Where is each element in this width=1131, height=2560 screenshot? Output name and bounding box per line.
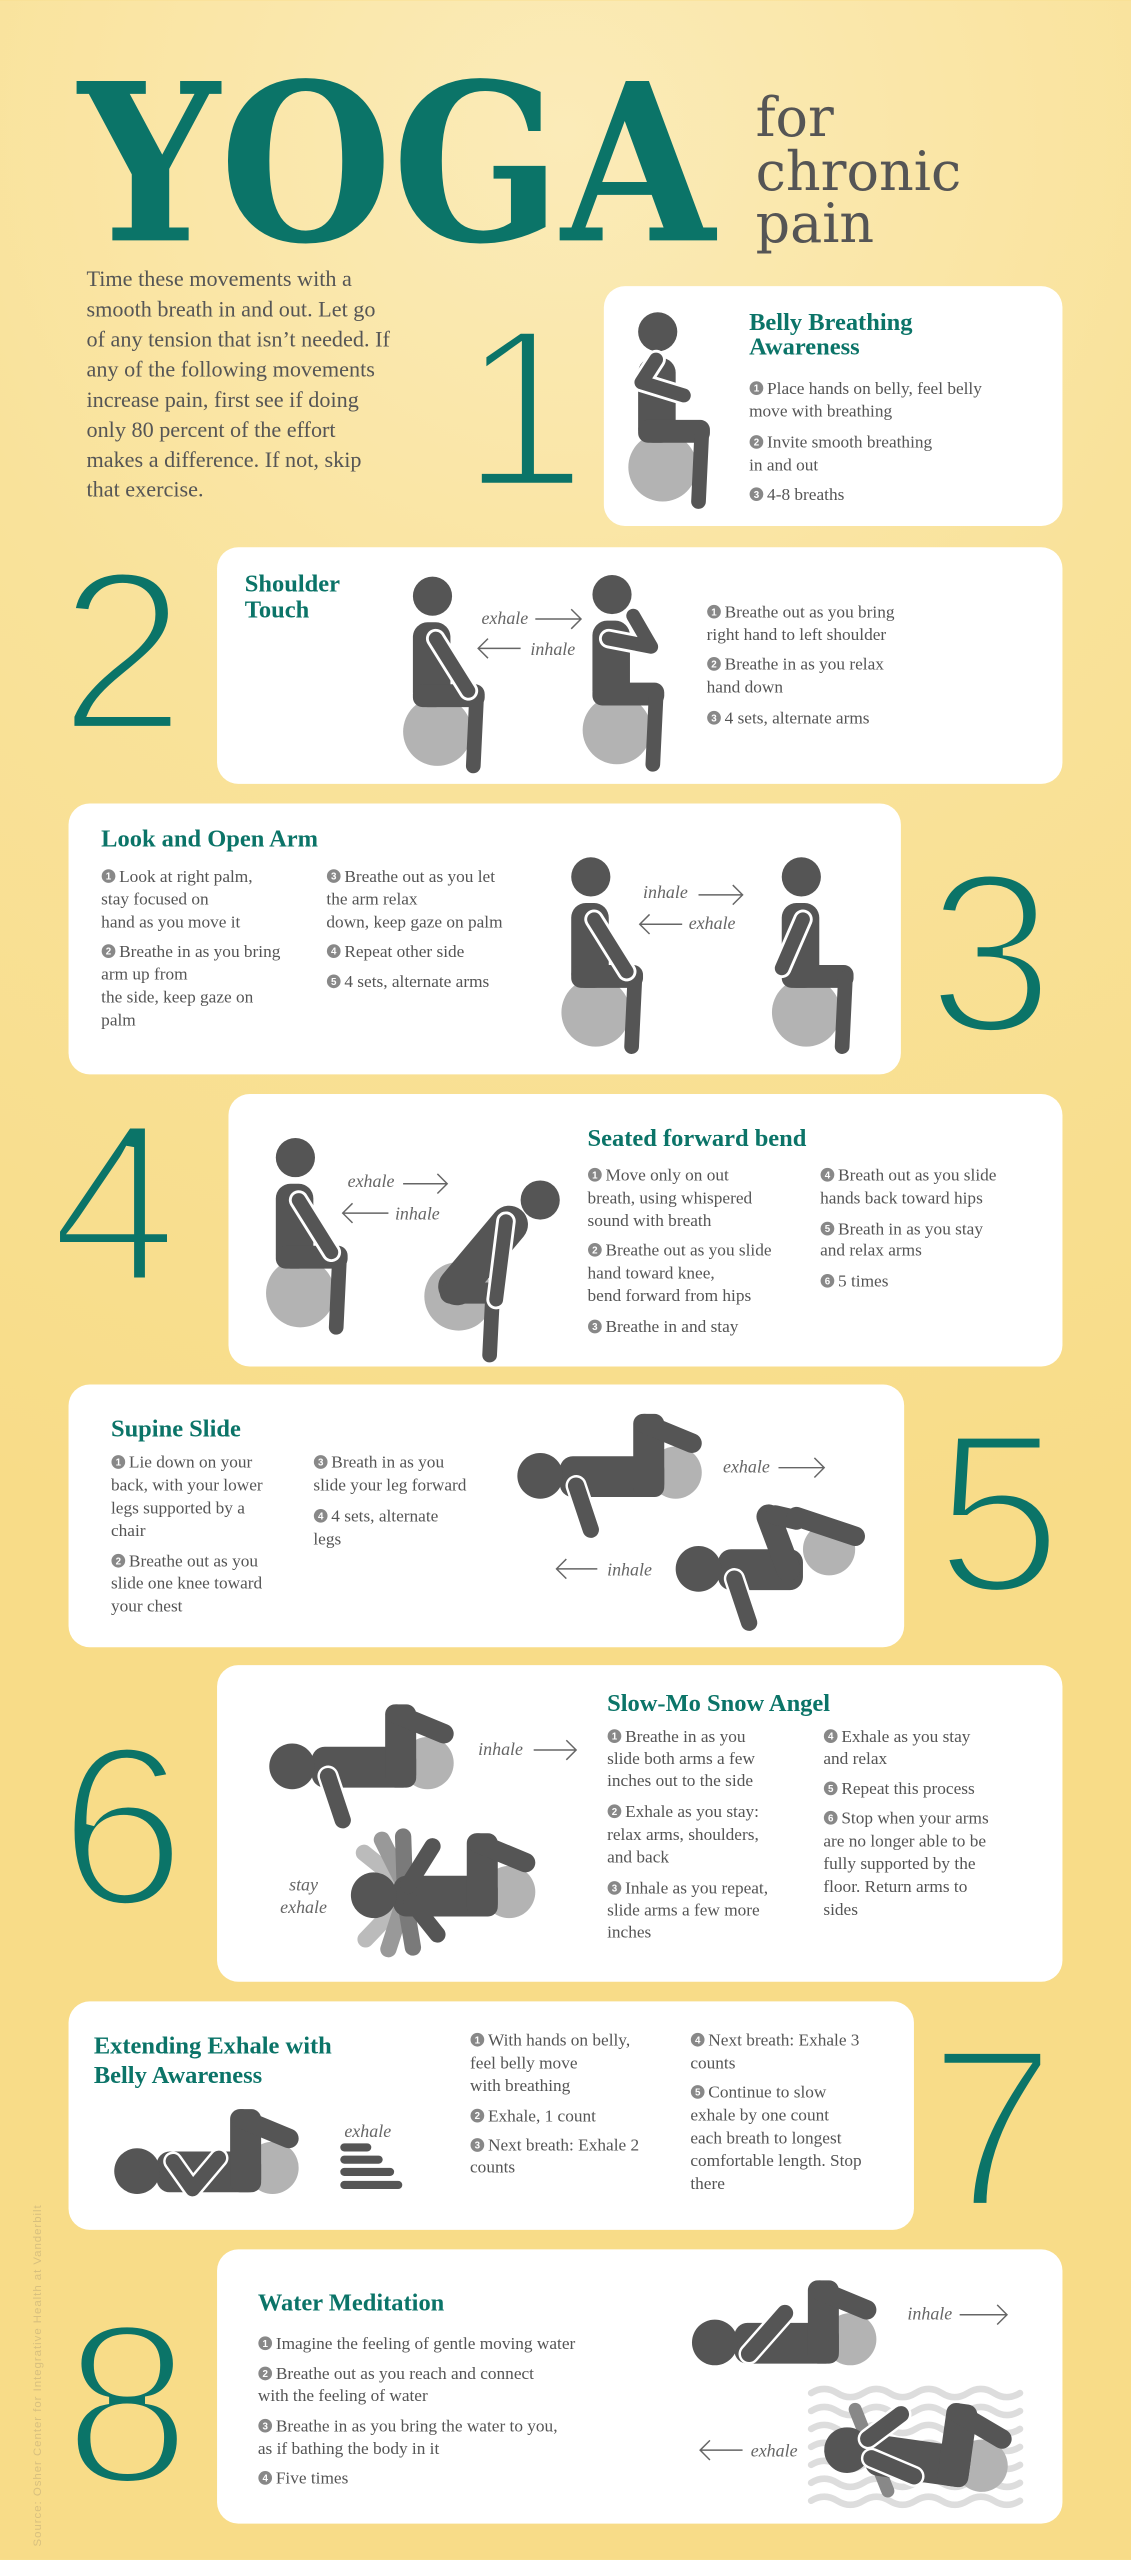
arrows exhale/inhale: [343, 1171, 447, 1224]
label stay exhale: exhale: [280, 1897, 327, 1917]
steps column 1: breath, using whispered: [588, 1188, 753, 1207]
icon: lying figure legs on chair: [517, 1414, 702, 1530]
steps column 1: 2: [475, 2111, 481, 2122]
icon: lying figure hands on belly: [114, 2109, 299, 2194]
steps column 1: Lie down on your: [129, 1453, 253, 1472]
subtitle: for: [756, 86, 834, 149]
steps column 1: With hands on belly,: [488, 2030, 630, 2049]
steps column 1: Exhale as you stay:: [625, 1802, 759, 1821]
steps column 2: floor. Return arms to: [823, 1877, 967, 1896]
steps column 2: counts: [690, 2053, 736, 2072]
panel: supine slide: [69, 1384, 904, 1647]
label stay exhale: stay: [289, 1874, 318, 1894]
steps: 4-8 breaths: [767, 485, 845, 504]
steps column 2: 5: [825, 1224, 831, 1235]
steps column 1: [111, 1453, 263, 1615]
steps column 1: 1: [612, 1732, 618, 1743]
steps: right hand to left shoulder: [707, 625, 886, 644]
steps column 1: back, with your lower: [111, 1476, 263, 1495]
panel: shoulder touch: [217, 547, 1062, 784]
steps column 1: 3: [612, 1884, 618, 1895]
panel: water meditation: [217, 2249, 1062, 2524]
steps column 1: [588, 1165, 772, 1336]
steps column 1: Next breath: Exhale 2: [488, 2136, 639, 2155]
heading: Belly Awareness: [94, 2062, 262, 2089]
steps column 1: the side, keep gaze on: [101, 988, 254, 1007]
steps column 2: Breath out as you slide: [838, 1165, 997, 1184]
steps: with the feeling of water: [258, 2386, 428, 2405]
steps column 1: 2: [592, 1245, 598, 1256]
steps column 2: exhale by one count: [690, 2105, 829, 2124]
arrow inhale: inhale: [907, 2304, 952, 2324]
arrows inhale/exhale: [640, 882, 743, 934]
steps column 2: [690, 2030, 862, 2193]
heading: Seated forward bend: [588, 1125, 807, 1152]
steps column 2: 3: [318, 1458, 324, 1469]
steps: Breathe out as you bring: [725, 602, 895, 621]
steps column 2: 5: [331, 977, 337, 988]
steps column 1: feel belly move: [470, 2053, 578, 2072]
steps column 1: slide both arms a few: [607, 1749, 755, 1768]
panel: look and open arm: [69, 803, 901, 1074]
steps: Breathe out as you reach and connect: [276, 2364, 534, 2383]
steps: hand down: [707, 677, 783, 696]
steps column 2: there: [690, 2174, 725, 2193]
icon: lying figure arms at sides: [269, 1704, 454, 1820]
icon: seated upright figure: [266, 1138, 348, 1327]
steps column 1: 1: [106, 872, 112, 883]
steps column 1: 3: [592, 1322, 598, 1333]
number 1: 1: [460, 281, 587, 536]
steps column 1: Inhale as you repeat,: [625, 1879, 768, 1898]
steps column 2: hands back toward hips: [820, 1188, 983, 1207]
steps column 1: [470, 2030, 639, 2177]
panel: seated forward bend: [228, 1094, 1062, 1366]
steps column 1: with breathing: [470, 2076, 571, 2095]
steps column 1: relax arms, shoulders,: [607, 1825, 759, 1844]
steps column 2: each breath to longest: [690, 2128, 842, 2147]
intro text: Time these movements with a: [86, 266, 352, 291]
arrows exhale/inhale: [478, 608, 581, 659]
steps column 1: inches: [607, 1923, 652, 1942]
steps column 1: 1: [475, 2035, 481, 2046]
subtitle: [756, 86, 961, 255]
steps column 2: slide your leg forward: [313, 1476, 467, 1495]
icon: exhale bars: exhale: [344, 2121, 391, 2141]
arrow inhale: [478, 1739, 576, 1760]
steps: 1: [754, 384, 760, 395]
steps: 3: [262, 2421, 268, 2432]
icon: seated figure arm down: [403, 577, 485, 766]
arrows exhale/inhale: exhale: [481, 608, 528, 628]
steps column 1: arm up from: [101, 965, 188, 984]
intro text: any of the following movements: [86, 357, 375, 382]
intro text: that exercise.: [86, 477, 204, 502]
steps: Place hands on belly, feel belly: [767, 379, 982, 398]
steps column 2: Repeat other side: [344, 942, 465, 961]
panel: slow-mo snow angel: [217, 1665, 1062, 1982]
steps column 2: Repeat this process: [841, 1779, 975, 1798]
number 8: 8: [64, 2277, 191, 2532]
subtitle: pain: [756, 192, 874, 255]
panel: belly breathing awareness: [604, 286, 1062, 526]
steps column 2: and relax arms: [820, 1241, 922, 1260]
icon: seated figure hands on belly: [628, 312, 710, 502]
intro text: smooth breath in and out. Let go: [86, 296, 376, 321]
steps column 2: and relax: [823, 1749, 888, 1768]
steps column 2: sides: [823, 1900, 858, 1919]
steps: 2: [711, 659, 717, 670]
steps column 1: [607, 1727, 768, 1942]
source credit: Source: Osher Center for Integrative Health at Vanderbilt: [32, 2204, 44, 2546]
number 7: 7: [929, 2001, 1056, 2256]
steps column 1: 2: [106, 947, 112, 958]
intro text: increase pain, first see if doing: [86, 387, 359, 412]
steps column 2: 3: [331, 872, 337, 883]
steps column 1: Breathe in as you bring: [119, 942, 281, 961]
steps: Breathe in as you bring the water to you,: [276, 2416, 558, 2435]
icon: lying figure reaching: [692, 2280, 876, 2365]
title: YOGA: [77, 35, 718, 292]
steps column 1: inches out to the side: [607, 1771, 753, 1790]
steps column 1: slide one knee toward: [111, 1573, 262, 1592]
number 6: 6: [59, 1699, 186, 1954]
intro text: of any tension that isn’t needed. If: [86, 326, 390, 351]
arrows inhale/exhale: exhale: [689, 913, 736, 933]
steps column 1: slide arms a few more: [607, 1901, 760, 1920]
steps: 2: [262, 2369, 268, 2380]
icon: lying figure arms fanning: [351, 1833, 535, 1949]
heading: Look and Open Arm: [101, 826, 318, 853]
number 5: 5: [935, 1386, 1062, 1641]
steps column 2: 4 sets, alternate arms: [344, 972, 490, 991]
steps column 2: legs: [313, 1529, 341, 1548]
steps column 1: your chest: [111, 1596, 183, 1615]
arrow inhale: inhale: [478, 1739, 523, 1759]
steps column 2: Breath in as you: [331, 1453, 444, 1472]
steps column 2: the arm relax: [326, 890, 418, 909]
steps column 2: fully supported by the: [823, 1854, 976, 1873]
icon: seated figure arm open: [772, 857, 854, 1047]
arrow exhale: [723, 1457, 824, 1477]
heading: Shoulder: [245, 570, 340, 597]
intro text: only 80 percent of the effort: [86, 417, 336, 442]
steps: 4 sets, alternate arms: [725, 708, 870, 727]
steps column 1: stay focused on: [101, 890, 209, 909]
steps column 2: Breathe out as you let: [344, 867, 495, 886]
arrows exhale/inhale: exhale: [348, 1171, 394, 1191]
steps: Imagine the feeling of gentle moving water: [276, 2334, 575, 2353]
heading: Slow-Mo Snow Angel: [607, 1690, 830, 1717]
steps column 2: Continue to slow: [708, 2083, 827, 2102]
steps column 2: Breath in as you stay: [838, 1219, 983, 1238]
steps column 2: comfortable length. Stop: [690, 2151, 862, 2170]
steps: Invite smooth breathing: [767, 433, 933, 452]
steps: Five times: [276, 2469, 349, 2488]
steps: in and out: [749, 456, 818, 475]
heading: Touch: [245, 596, 310, 623]
steps column 1: 2: [116, 1556, 122, 1567]
steps column 2: 5: [695, 2088, 701, 2099]
intro text: makes a difference. If not, skip: [86, 447, 361, 472]
arrow inhale: [907, 2304, 1007, 2325]
steps column 1: palm: [101, 1010, 136, 1029]
steps column 1: legs supported by a: [111, 1498, 245, 1517]
steps column 1: 3: [475, 2141, 481, 2152]
steps column 2: 5: [828, 1784, 834, 1795]
number 4: 4: [51, 1076, 178, 1331]
steps column 1: Breathe out as you: [129, 1551, 258, 1570]
number 3: 3: [927, 826, 1054, 1081]
icon: figure in water: [811, 2386, 1020, 2505]
arrows exhale/inhale: inhale: [530, 639, 575, 659]
heading: Supine Slide: [111, 1416, 241, 1443]
steps: 4: [262, 2474, 268, 2485]
steps column 1: Breathe out as you slide: [605, 1241, 772, 1260]
steps column 1: Exhale, 1 count: [488, 2106, 596, 2125]
steps column 1: hand toward knee,: [588, 1263, 715, 1282]
steps column 1: counts: [470, 2158, 515, 2177]
heading: Water Meditation: [258, 2290, 445, 2317]
number 2: 2: [59, 524, 186, 779]
steps column 2: 4: [828, 1732, 834, 1743]
steps column 1: 2: [612, 1807, 618, 1818]
steps column 1: 1: [592, 1170, 598, 1181]
steps: 1: [711, 607, 717, 618]
steps column 2: Stop when your arms: [841, 1808, 989, 1827]
steps: [749, 379, 982, 504]
arrow exhale: exhale: [723, 1457, 770, 1477]
steps column 2: 4 sets, alternate: [331, 1507, 439, 1526]
steps column 1: chair: [111, 1521, 146, 1540]
steps column 1: Look at right palm,: [119, 867, 253, 886]
arrow inhale: [557, 1559, 652, 1579]
heading: Awareness: [749, 334, 860, 361]
steps column 2: 4: [695, 2035, 701, 2046]
steps column 1: [101, 867, 281, 1029]
steps column 1: Move only on out: [605, 1165, 729, 1184]
arrows inhale/exhale: inhale: [643, 882, 688, 902]
intro text: [86, 266, 390, 502]
steps: [258, 2334, 575, 2488]
icon: lying figure knee to chest: [676, 1515, 855, 1623]
steps: 3: [711, 713, 717, 724]
icon: seated figure hand to shoulder: [583, 575, 664, 764]
steps column 2: [820, 1165, 997, 1291]
steps column 2: [823, 1727, 989, 1919]
steps column 2: Exhale as you stay: [841, 1727, 971, 1746]
steps column 1: Breathe in as you: [625, 1727, 746, 1746]
heading: Extending Exhale with: [94, 2033, 332, 2060]
steps column 2: 4: [318, 1511, 324, 1522]
arrow exhale: [700, 2440, 798, 2461]
subtitle: chronic: [756, 140, 961, 203]
steps column 2: 6: [828, 1813, 834, 1824]
steps: Breathe in as you relax: [725, 655, 884, 674]
steps column 2: 6: [825, 1276, 831, 1287]
steps column 2: Next breath: Exhale 3: [708, 2030, 859, 2049]
steps column 1: Breathe in and stay: [605, 1317, 739, 1336]
steps: 2: [754, 438, 760, 449]
icon: exhale bars: [344, 2121, 398, 2185]
icon: bent forward figure: [424, 1180, 560, 1355]
arrows exhale/inhale: inhale: [395, 1204, 440, 1224]
steps column 2: [313, 1453, 467, 1548]
steps column 1: 1: [116, 1458, 122, 1469]
steps column 2: 4: [825, 1170, 831, 1181]
steps: 1: [262, 2339, 268, 2350]
steps: as if bathing the body in it: [258, 2439, 439, 2458]
steps column 1: sound with breath: [588, 1211, 712, 1230]
steps column 2: 4: [331, 947, 337, 958]
steps: 3: [754, 490, 760, 501]
arrow exhale: exhale: [751, 2441, 798, 2461]
steps: move with breathing: [749, 402, 892, 421]
steps column 1: bend forward from hips: [588, 1286, 751, 1305]
steps column 2: [326, 867, 503, 991]
steps column 1: hand as you move it: [101, 912, 241, 931]
icon: seated figure arm down: [561, 857, 643, 1047]
steps column 2: are no longer able to be: [823, 1831, 986, 1850]
steps column 2: 5 times: [838, 1272, 889, 1291]
heading: Belly Breathing: [749, 309, 912, 336]
steps: [707, 602, 895, 727]
panel: extending exhale with belly awareness: [69, 2001, 914, 2230]
arrow inhale: inhale: [607, 1559, 652, 1579]
steps column 1: and back: [607, 1848, 669, 1867]
steps column 2: down, keep gaze on palm: [326, 912, 503, 931]
